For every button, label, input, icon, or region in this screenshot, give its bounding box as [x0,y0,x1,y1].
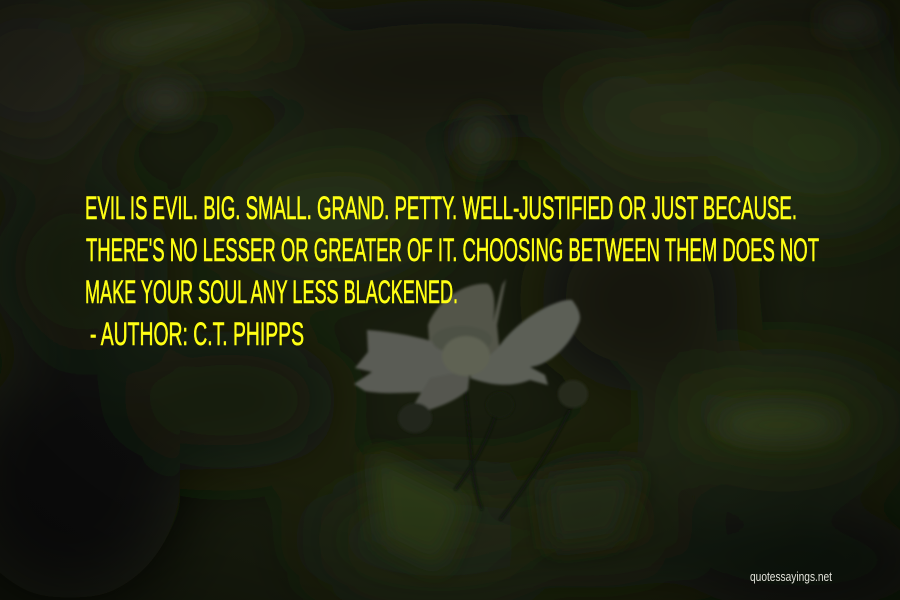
watermark: quotessayings.net [750,569,832,584]
flower petal: lower [410,370,470,415]
flower petal: top [428,279,506,355]
flower petal: left [354,330,465,393]
illustration: white flower with stems and buds [354,279,588,520]
quote text: MAKE YOUR SOUL ANY LESS BLACKENED. [85,274,458,310]
quote text [85,190,819,310]
flower petal: right [470,300,580,385]
author attribution: - AUTHOR: C.T. PHIPPS [90,316,304,352]
buds [558,380,588,408]
flower centre [432,326,492,354]
